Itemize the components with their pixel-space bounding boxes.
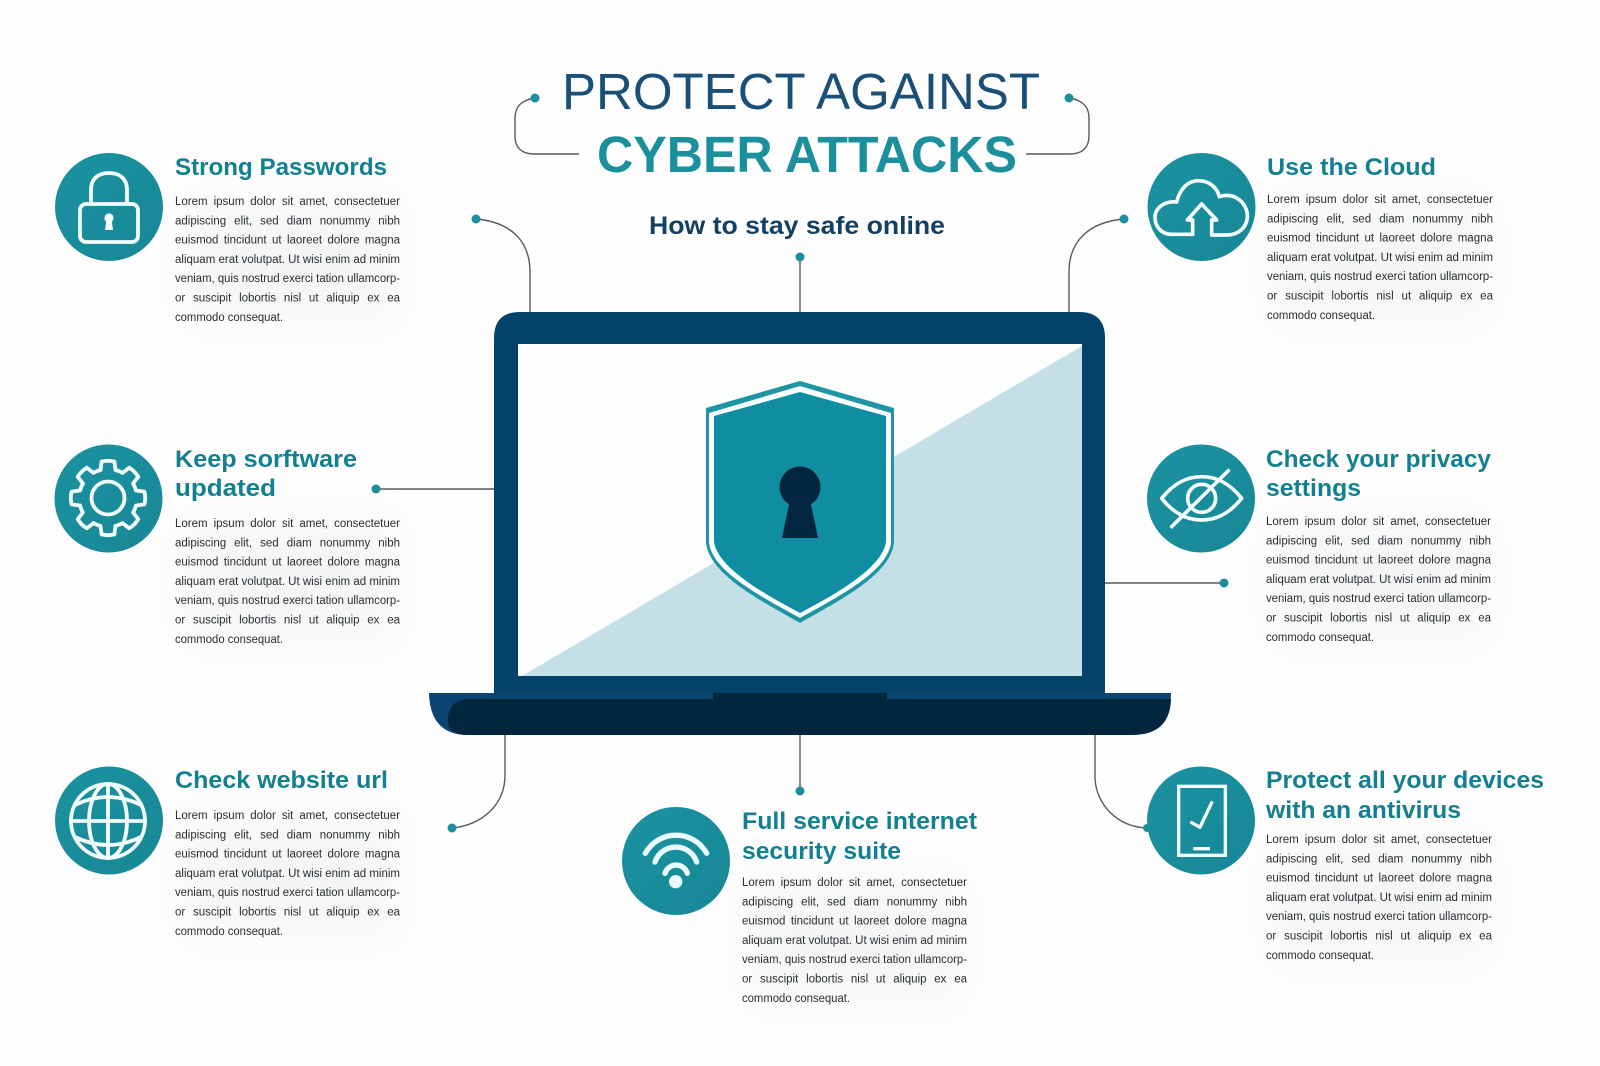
body text: euismod tincidunt ut laoreet dolore magna (1267, 233, 1494, 245)
keyhole (780, 466, 820, 538)
body text: commodo consequat. (1267, 310, 1375, 322)
icon: crossed eye (1147, 444, 1255, 552)
screen diagonal (522, 346, 1082, 676)
body text: veniam, quis nostrud exerci tation ullamcorp- (175, 887, 400, 899)
heading: Strong Passwords (175, 154, 387, 181)
body text: Lorem ipsum dolor sit amet, consectetuer (175, 518, 400, 530)
body text (175, 196, 401, 324)
heading: Use the Cloud (1267, 154, 1436, 181)
body text: veniam, quis nostrud exerci tation ullamcorp- (1266, 911, 1492, 923)
body text: Lorem ipsum dolor sit amet, consectetuer (1267, 194, 1493, 206)
body text: commodo consequat. (1266, 950, 1374, 962)
heading (175, 446, 357, 502)
laptop screen (518, 344, 1082, 676)
panel: keep software updated (54, 444, 401, 646)
body text: euismod tincidunt ut laoreet dolore magna (175, 849, 401, 861)
body text: euismod tincidunt ut laoreet dolore magna (175, 235, 401, 247)
shield (706, 381, 894, 623)
body text: Lorem ipsum dolor sit amet, consectetuer (175, 196, 400, 208)
panel: full service internet security suite (622, 807, 977, 1005)
connector: check website url (448, 735, 505, 832)
body text: or suscipit lobortis nisl ut aliquip ex ea (1266, 612, 1492, 624)
connector: internet security suite (796, 735, 804, 796)
icon: wifi (622, 807, 730, 915)
body text: veniam, quis nostrud exerci tation ullamcorp- (742, 954, 967, 966)
body text: aliquam erat volutpat. Ut wisi enim ad minim (175, 254, 400, 266)
body text: Lorem ipsum dolor sit amet, consectetuer (1266, 834, 1492, 846)
connector: subtitle (796, 252, 804, 312)
panel: protect all your devices (1147, 766, 1544, 962)
laptop base (429, 693, 1171, 735)
panel: strong passwords (55, 153, 401, 324)
body text: or suscipit lobortis nisl ut aliquip ex ea (175, 614, 401, 626)
body text: adipiscing elit, sed diam nonummy nibh (175, 215, 400, 227)
body text: aliquam erat volutpat. Ut wisi enim ad minim (1266, 574, 1491, 586)
title bracket left (515, 94, 579, 154)
icon: cloud upload (1148, 153, 1256, 261)
heading (1265, 767, 1544, 824)
laptop lid (494, 312, 1105, 696)
icon: padlock (55, 153, 163, 261)
title line 1: PROTECT AGAINST (562, 63, 1040, 120)
body text: veniam, quis nostrud exerci tation ullamcorp- (1266, 593, 1491, 605)
body text: Lorem ipsum dolor sit amet, consectetuer (175, 810, 400, 822)
body text: aliquam erat volutpat. Ut wisi enim ad minim (1266, 892, 1492, 904)
body text: adipiscing elit, sed diam nonummy nibh (1267, 213, 1493, 225)
body text: commodo consequat. (175, 926, 283, 938)
body text (175, 810, 401, 938)
body text: euismod tincidunt ut laoreet dolore magna (1266, 873, 1493, 885)
icon: phone with check (1147, 766, 1255, 874)
body text: adipiscing elit, sed diam nonummy nibh (1266, 853, 1492, 865)
body text: or suscipit lobortis nisl ut aliquip ex ea (742, 974, 968, 986)
heading (742, 808, 977, 865)
heading (1266, 446, 1491, 502)
connector: privacy settings (1105, 578, 1228, 588)
body text: aliquam erat volutpat. Ut wisi enim ad minim (742, 935, 967, 947)
connector: strong passwords (472, 214, 530, 312)
body text: euismod tincidunt ut laoreet dolore magna (175, 557, 401, 569)
body text: adipiscing elit, sed diam nonummy nibh (175, 829, 400, 841)
heading: Keep sorftware (175, 446, 357, 473)
heading: Check your privacy (1266, 446, 1491, 473)
body text: aliquam erat volutpat. Ut wisi enim ad minim (175, 576, 400, 588)
icon: gear (54, 444, 162, 552)
heading: with an antivirus (1265, 797, 1461, 824)
laptop (429, 312, 1171, 735)
body text: or suscipit lobortis nisl ut aliquip ex ea (175, 292, 401, 304)
body text: Lorem ipsum dolor sit amet, consectetuer (742, 877, 967, 889)
title (562, 63, 1040, 183)
connector: antivirus (1095, 735, 1151, 832)
subtitle: How to stay safe online (649, 212, 945, 240)
body text: commodo consequat. (742, 993, 850, 1005)
heading: updated (175, 475, 276, 502)
body text: veniam, quis nostrud exerci tation ullamcorp- (1267, 271, 1493, 283)
body text: adipiscing elit, sed diam nonummy nibh (742, 896, 967, 908)
panel: use the cloud (1148, 153, 1494, 322)
body text: or suscipit lobortis nisl ut aliquip ex ea (1266, 930, 1493, 942)
heading: Protect all your devices (1266, 767, 1544, 794)
heading: security suite (742, 838, 901, 865)
body text: Lorem ipsum dolor sit amet, consectetuer (1266, 516, 1491, 528)
body text: adipiscing elit, sed diam nonummy nibh (175, 537, 400, 549)
body text: veniam, quis nostrud exerci tation ullamcorp- (175, 595, 400, 607)
body text: commodo consequat. (175, 312, 283, 324)
connector: keep software updated (372, 484, 494, 494)
body text: veniam, quis nostrud exerci tation ullamcorp- (175, 273, 400, 285)
body text: or suscipit lobortis nisl ut aliquip ex ea (175, 906, 401, 918)
title bracket right (1026, 94, 1089, 154)
body text: adipiscing elit, sed diam nonummy nibh (1266, 535, 1491, 547)
body text: euismod tincidunt ut laoreet dolore magna (742, 916, 968, 928)
heading: Check website url (175, 767, 388, 794)
heading: Full service internet (742, 808, 977, 835)
icon: globe (55, 766, 163, 874)
connector: use the cloud (1069, 214, 1128, 312)
panel: check your privacy settings (1147, 444, 1492, 644)
title line 2: CYBER ATTACKS (597, 126, 1017, 183)
body text: or suscipit lobortis nisl ut aliquip ex ea (1267, 290, 1494, 302)
body text: commodo consequat. (1266, 632, 1374, 644)
heading: settings (1266, 475, 1361, 502)
body text (175, 518, 401, 646)
body text (1266, 516, 1492, 644)
body text (1266, 834, 1493, 962)
body text: commodo consequat. (175, 634, 283, 646)
body text: aliquam erat volutpat. Ut wisi enim ad minim (1267, 252, 1493, 264)
body text: aliquam erat volutpat. Ut wisi enim ad minim (175, 868, 400, 880)
body text (1267, 194, 1494, 322)
body text (742, 877, 968, 1005)
body text: euismod tincidunt ut laoreet dolore magna (1266, 555, 1492, 567)
panel: check website url (55, 766, 401, 938)
